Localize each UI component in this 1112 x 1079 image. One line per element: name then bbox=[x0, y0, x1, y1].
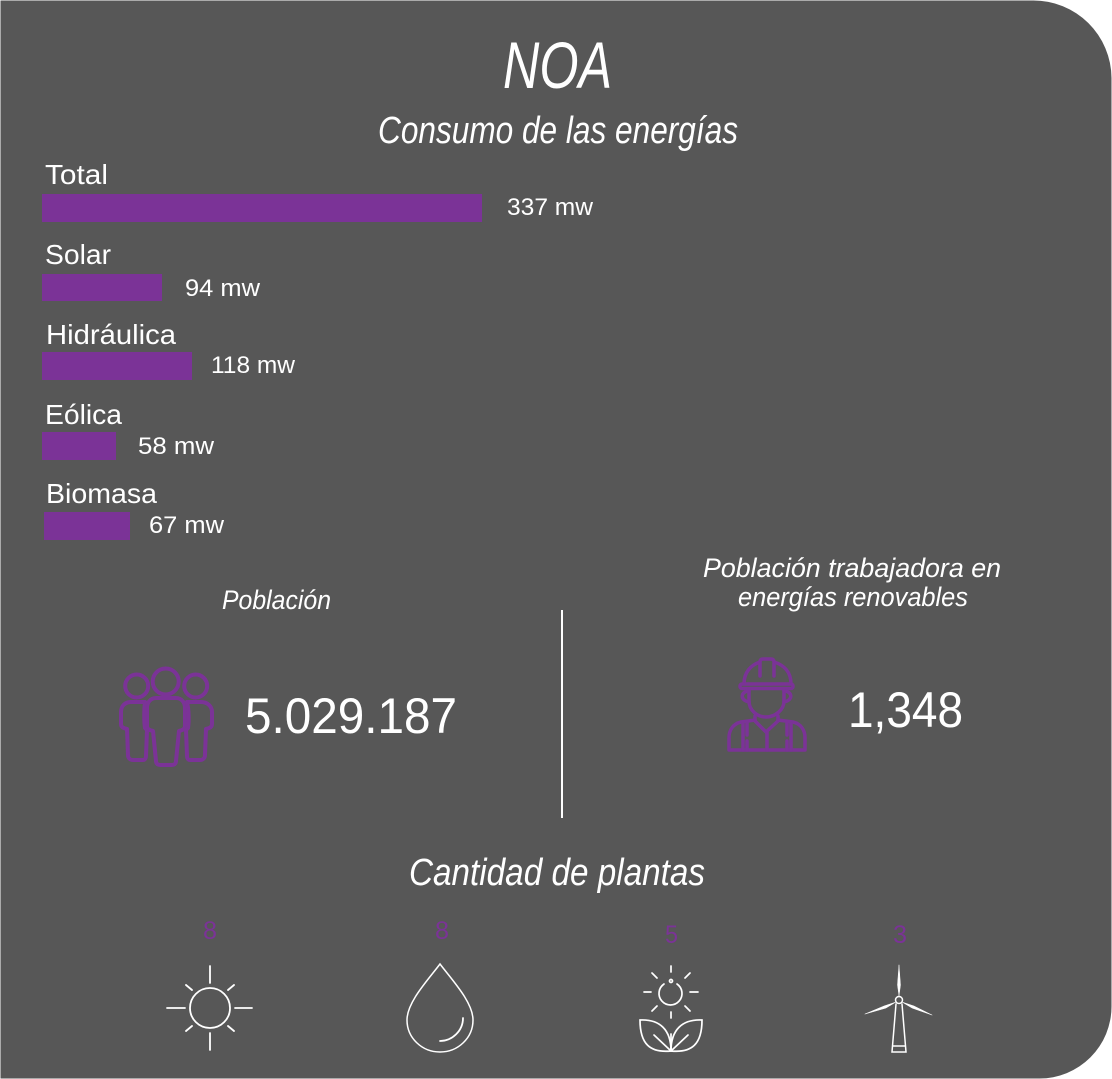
bar row: solar bbox=[42, 239, 261, 302]
icon: worker bbox=[729, 659, 805, 750]
count: biomass: 5 bbox=[665, 921, 678, 949]
bar row: biomass: Biomasa bbox=[46, 478, 157, 509]
worker value: 1,348 bbox=[848, 682, 963, 738]
icon: wind turbine bbox=[865, 965, 932, 1052]
title: NOA bbox=[503, 28, 612, 102]
heading: renewable workforce: energías renovables bbox=[738, 582, 968, 612]
heading: renewable workforce: Población trabajadora en bbox=[703, 553, 1001, 583]
bar row: wind: 58 mw bbox=[138, 433, 215, 460]
bar row: total: Total bbox=[45, 159, 108, 190]
bar row: wind: Eólica bbox=[45, 399, 122, 430]
icon: water drop bbox=[407, 964, 473, 1052]
bar row: total bbox=[42, 159, 594, 222]
icon: sun bbox=[167, 966, 252, 1050]
heading: energy consumption: Consumo de las energías bbox=[378, 110, 738, 152]
population value: 5.029.187 bbox=[245, 688, 457, 744]
count: wind: 3 bbox=[893, 921, 907, 949]
heading: renewable workforce bbox=[703, 553, 1001, 612]
bar row: hydro bbox=[42, 319, 296, 380]
divider bbox=[561, 610, 563, 818]
icon: sun and leaves bbox=[640, 966, 702, 1051]
bar row: total: 337 mw bbox=[507, 194, 594, 221]
bar row: wind bbox=[42, 399, 215, 460]
icon: people bbox=[121, 668, 212, 765]
count: solar: 8 bbox=[203, 917, 217, 945]
bar row: solar: 94 mw bbox=[185, 275, 261, 302]
count: hydro: 8 bbox=[435, 917, 449, 945]
bar row: biomass: 67 mw bbox=[149, 512, 225, 539]
bar chart: energy consumption bbox=[42, 159, 594, 540]
bar row: hydro: 118 mw bbox=[211, 352, 296, 379]
bar row: solar: Solar bbox=[45, 239, 111, 270]
heading: plant count: Cantidad de plantas bbox=[409, 852, 705, 894]
bar row: hydro: Hidráulica bbox=[46, 319, 176, 350]
heading: population: Población bbox=[222, 585, 331, 615]
bar row: biomass bbox=[44, 478, 225, 540]
